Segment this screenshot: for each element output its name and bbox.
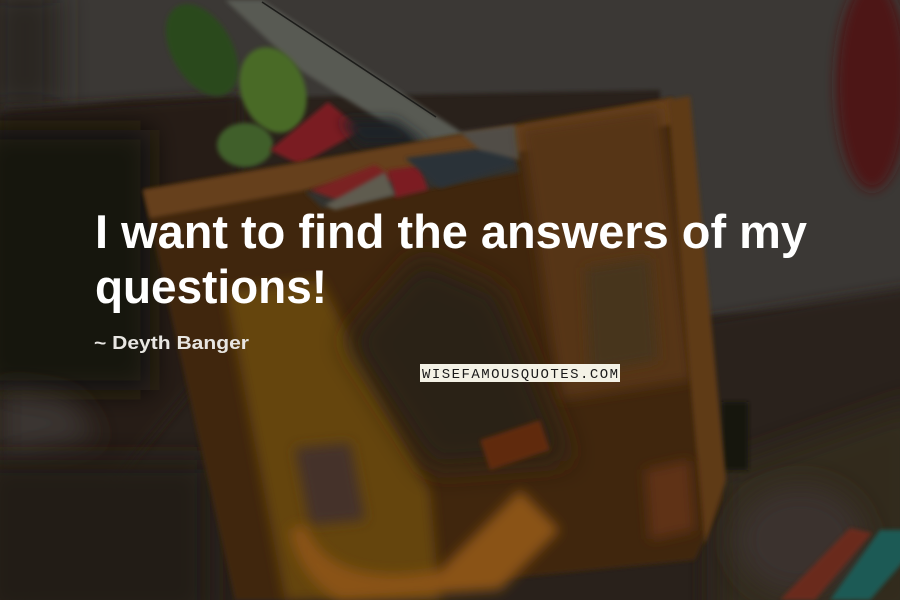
background photo: orange crate	[143, 96, 726, 600]
background photo: foreground toy	[735, 485, 900, 600]
author attribution: ~ Deyth Banger	[94, 332, 249, 353]
quote text	[95, 205, 807, 313]
watermark badge: WISEFAMOUSQUOTES.COM	[422, 367, 618, 383]
quote line 2: questions!	[95, 260, 327, 313]
quote line 1: I want to find the answers of my	[95, 205, 807, 258]
background photo: book and vegetables	[151, 0, 504, 167]
